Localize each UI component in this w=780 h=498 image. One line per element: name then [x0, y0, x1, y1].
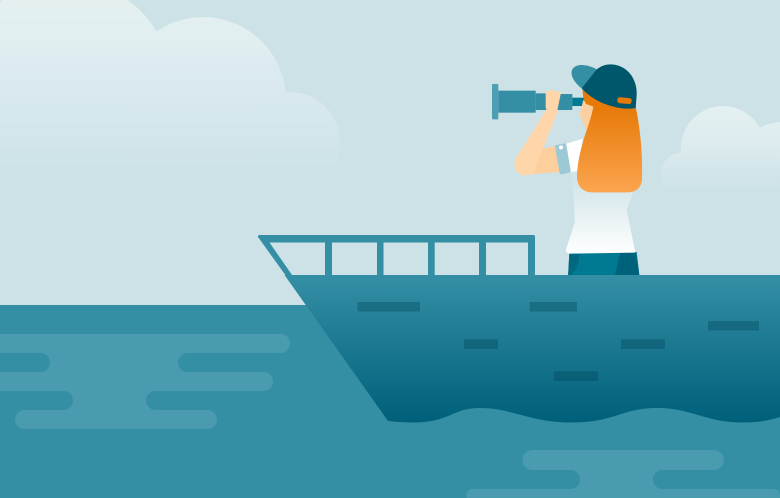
arm [514, 90, 561, 175]
ripples: right water [450, 450, 780, 498]
hair [577, 87, 642, 192]
front wave [370, 408, 780, 498]
large cloud [0, 0, 340, 193]
armband [555, 143, 571, 174]
ship hull [284, 275, 780, 440]
trousers [568, 252, 640, 280]
small cloud [661, 106, 780, 212]
person with telescope [492, 64, 642, 280]
ripples: left water [0, 334, 308, 429]
shirt [565, 139, 635, 254]
telescope [492, 84, 586, 119]
cap [572, 64, 637, 109]
face and neck [580, 100, 597, 132]
hull planks [358, 302, 759, 381]
sea [0, 305, 780, 498]
ship railing [260, 236, 534, 275]
